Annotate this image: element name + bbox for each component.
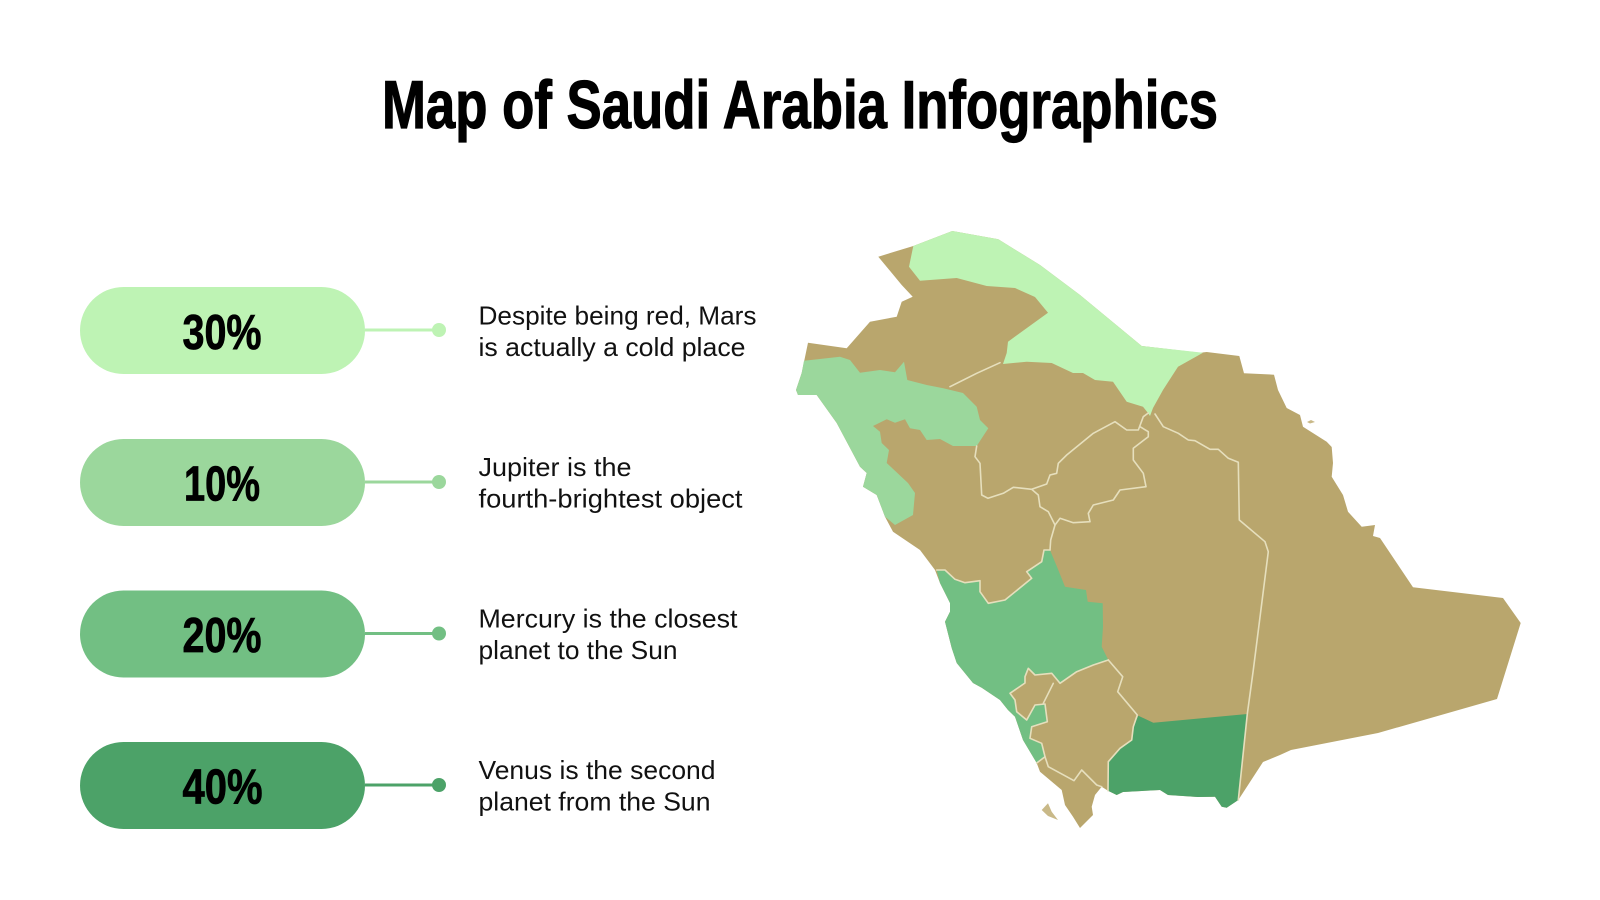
panel: item 20% (80, 590, 738, 678)
panel: item 40% (80, 742, 716, 829)
map of Saudi Arabia (796, 231, 1521, 828)
map: south-west region, 20% (937, 550, 1108, 763)
description: 10% (478, 452, 743, 514)
value: 10%: 10% (184, 458, 260, 512)
connector: 20% (365, 626, 446, 640)
pill: 10% (80, 439, 365, 526)
connector: 40% (365, 778, 446, 792)
value: 20%: 20% (182, 609, 262, 663)
map: northern region, 30% (909, 231, 1203, 416)
connector: 30% (365, 323, 446, 337)
panel: item 30% (80, 287, 756, 374)
pill: 30% (80, 287, 365, 374)
connector: 10% (365, 475, 446, 489)
map: internal borders (937, 363, 1268, 800)
description: 10%: Jupiter is the (478, 452, 632, 482)
pill: 20% (80, 590, 365, 678)
value: 40%: 40% (182, 760, 262, 814)
map: country base (796, 231, 1521, 828)
value: 30%: 30% (182, 306, 262, 360)
description: 20% (478, 604, 738, 665)
pill: 40% (80, 742, 365, 829)
map: north-west region, 10% (796, 357, 988, 525)
map: southern region, 40% (1108, 714, 1247, 808)
title: Map of Saudi Arabia Infographics (382, 67, 1218, 143)
description: 40%: planet from the Sun (478, 786, 710, 816)
description: 30%: is actually a cold place (478, 332, 746, 362)
description: 10%: fourth-brightest object (478, 484, 743, 514)
description: 40%: Venus is the second (478, 755, 716, 785)
description: 40% (478, 755, 716, 816)
map: islands (1042, 420, 1315, 820)
panel: item 10% (80, 439, 743, 526)
description: 20%: planet to the Sun (478, 635, 678, 665)
description: 30%: Despite being red, Mars (478, 300, 756, 330)
description: 30% (478, 300, 756, 362)
description: 20%: Mercury is the closest (478, 604, 738, 634)
